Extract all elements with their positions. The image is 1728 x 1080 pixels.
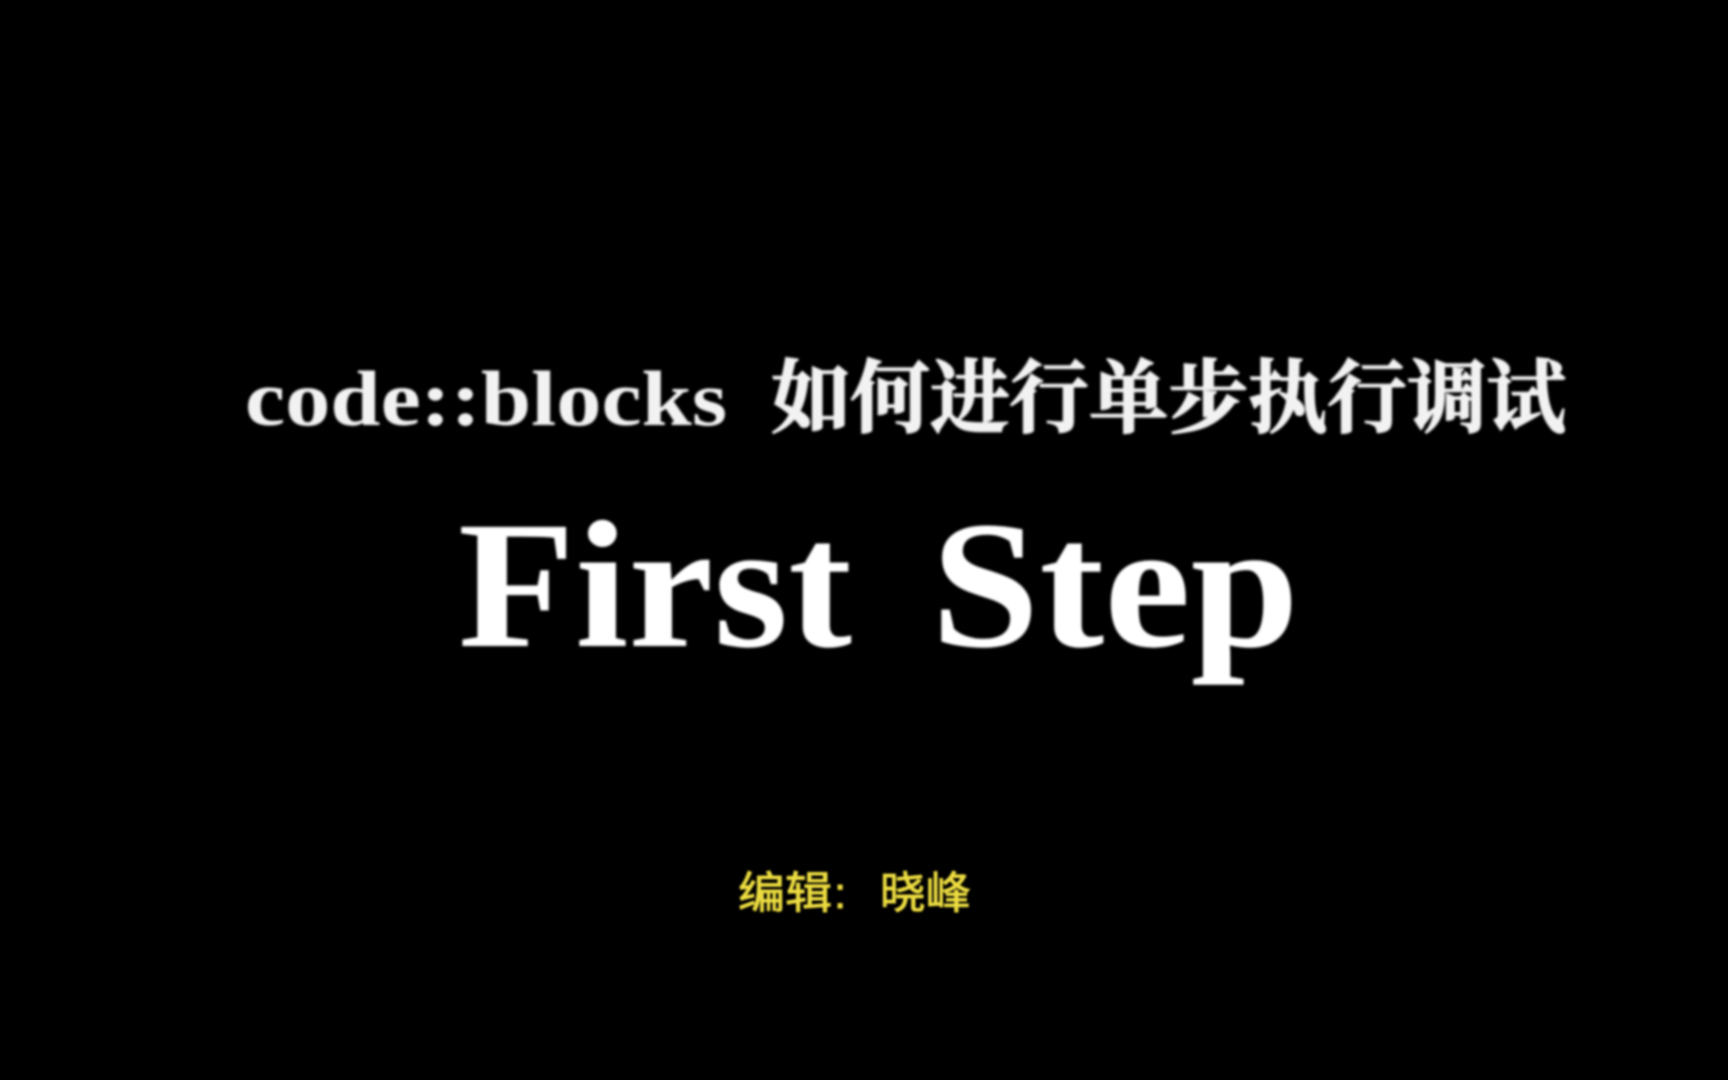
subtitle: code::blocks step debugging: 如何进行单步执行调试 [771, 356, 1566, 444]
credit: editor name: 晓峰 [880, 869, 971, 918]
title: First Step [458, 485, 1299, 686]
credit: editor name: : [834, 869, 846, 918]
credit: editor name [738, 869, 971, 918]
subtitle: code::blocks step debugging: code::blocks [245, 355, 727, 442]
title: First Step: First [458, 485, 852, 686]
title: First Step: Step [931, 485, 1299, 686]
subtitle: code::blocks step debugging [245, 355, 1566, 444]
credit: editor name: 编辑 [738, 869, 832, 918]
